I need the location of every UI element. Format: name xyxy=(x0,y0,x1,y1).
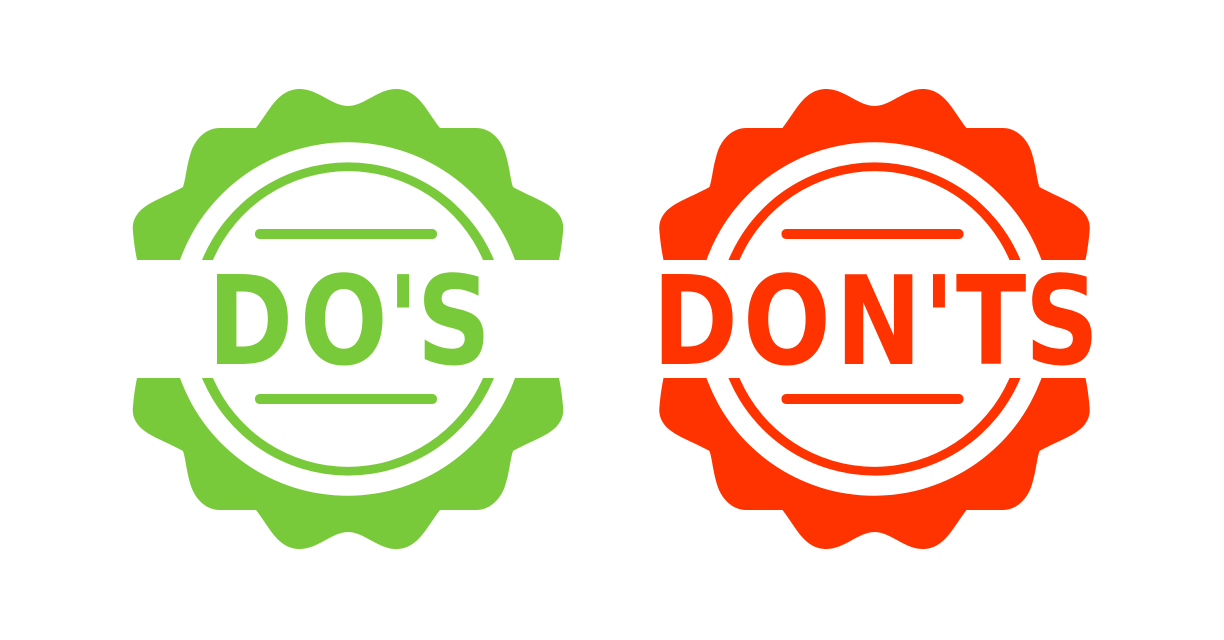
badge: don'ts (red) xyxy=(652,89,1099,549)
inner ring, top arc xyxy=(202,162,494,260)
scalloped seal, bottom half xyxy=(659,378,1090,549)
inner ring, bottom arc xyxy=(728,378,1020,476)
scalloped seal, bottom half xyxy=(133,378,563,549)
label: DO'S: DO'S xyxy=(207,250,491,393)
bottom rule xyxy=(255,394,437,404)
inner ring, top arc xyxy=(728,162,1020,260)
scalloped seal, top half xyxy=(659,89,1090,260)
top rule xyxy=(255,229,437,239)
bottom rule xyxy=(782,394,964,404)
badge: do's (green) xyxy=(133,89,563,549)
top rule xyxy=(782,229,964,239)
inner ring, bottom arc xyxy=(202,378,494,476)
scalloped seal, top half xyxy=(133,89,563,260)
label: DON'TS: DON'TS xyxy=(652,250,1099,393)
